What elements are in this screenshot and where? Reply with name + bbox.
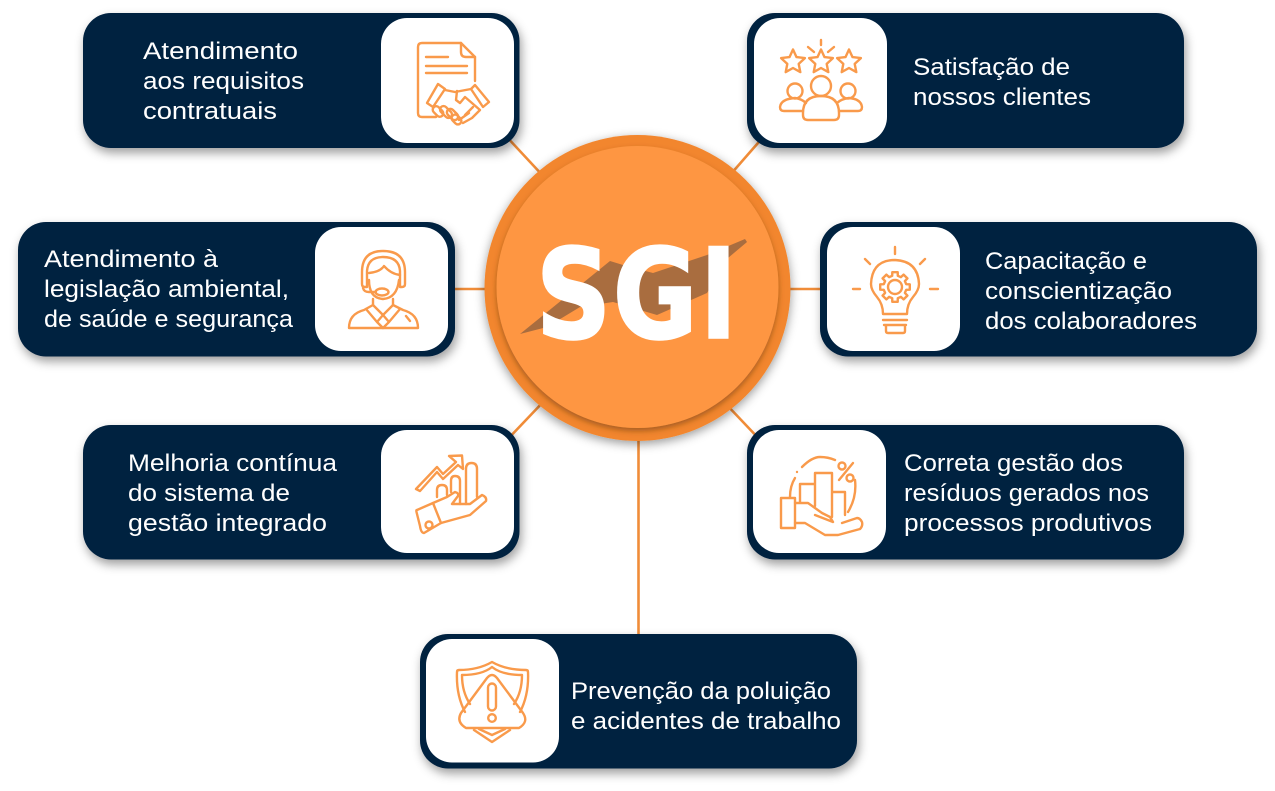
icon: light bulb with gear: [853, 247, 938, 333]
connector lines: [450, 135, 825, 636]
card: customer satisfaction: [747, 13, 1184, 148]
card text: [904, 450, 1152, 537]
card text: [571, 678, 841, 735]
card: training: [820, 222, 1257, 356]
card: waste management: [747, 425, 1184, 560]
brush stripe: [520, 239, 747, 334]
card text: de saúde e segurança: [44, 306, 293, 333]
card text: Melhoria contínua: [128, 450, 337, 477]
card text: [913, 54, 1091, 111]
card text: Satisfação de: [913, 54, 1070, 81]
card text: Atendimento: [143, 38, 298, 65]
card text: gestão integrado: [128, 510, 327, 537]
card text: Capacitação e: [985, 248, 1147, 275]
icon: hand with rising chart: [416, 456, 486, 533]
icon: document with handshake: [418, 43, 489, 126]
card text: contratuais: [143, 98, 277, 125]
card text: legislação ambiental,: [44, 276, 289, 303]
card: continuous improvement: [83, 425, 520, 560]
SGI title: S: [536, 224, 611, 368]
card text: processos produtivos: [904, 510, 1152, 537]
card text: nossos clientes: [913, 84, 1091, 111]
card text: Atendimento à: [44, 246, 218, 273]
icon: stars and people: [780, 40, 862, 120]
card text: resíduos gerados nos: [904, 480, 1149, 507]
card text: e acidentes de trabalho: [571, 708, 841, 735]
card text: [985, 248, 1197, 335]
card text: conscientização: [985, 278, 1172, 305]
icon: hand with bars and percent: [781, 457, 862, 535]
card text: aos requisitos: [143, 68, 304, 95]
central SGI circle: [484, 135, 790, 441]
card text: [44, 246, 293, 333]
card: pollution and accident prevention: [420, 634, 857, 768]
card text: dos colaboradores: [985, 308, 1197, 335]
icon: attendant with headset: [349, 251, 418, 328]
SGI title: G: [613, 222, 697, 367]
card: environmental legislation: [18, 222, 455, 356]
card text: Correta gestão dos: [904, 450, 1123, 477]
card: contract requirements: [83, 13, 520, 148]
icon: shield with warning triangle: [457, 662, 528, 742]
SGI title: I: [700, 224, 736, 368]
card text: do sistema de: [128, 480, 290, 507]
card text: [128, 450, 337, 537]
SGI title: [536, 222, 736, 368]
card text: Prevenção da poluição: [571, 678, 831, 705]
card text: [143, 38, 304, 125]
